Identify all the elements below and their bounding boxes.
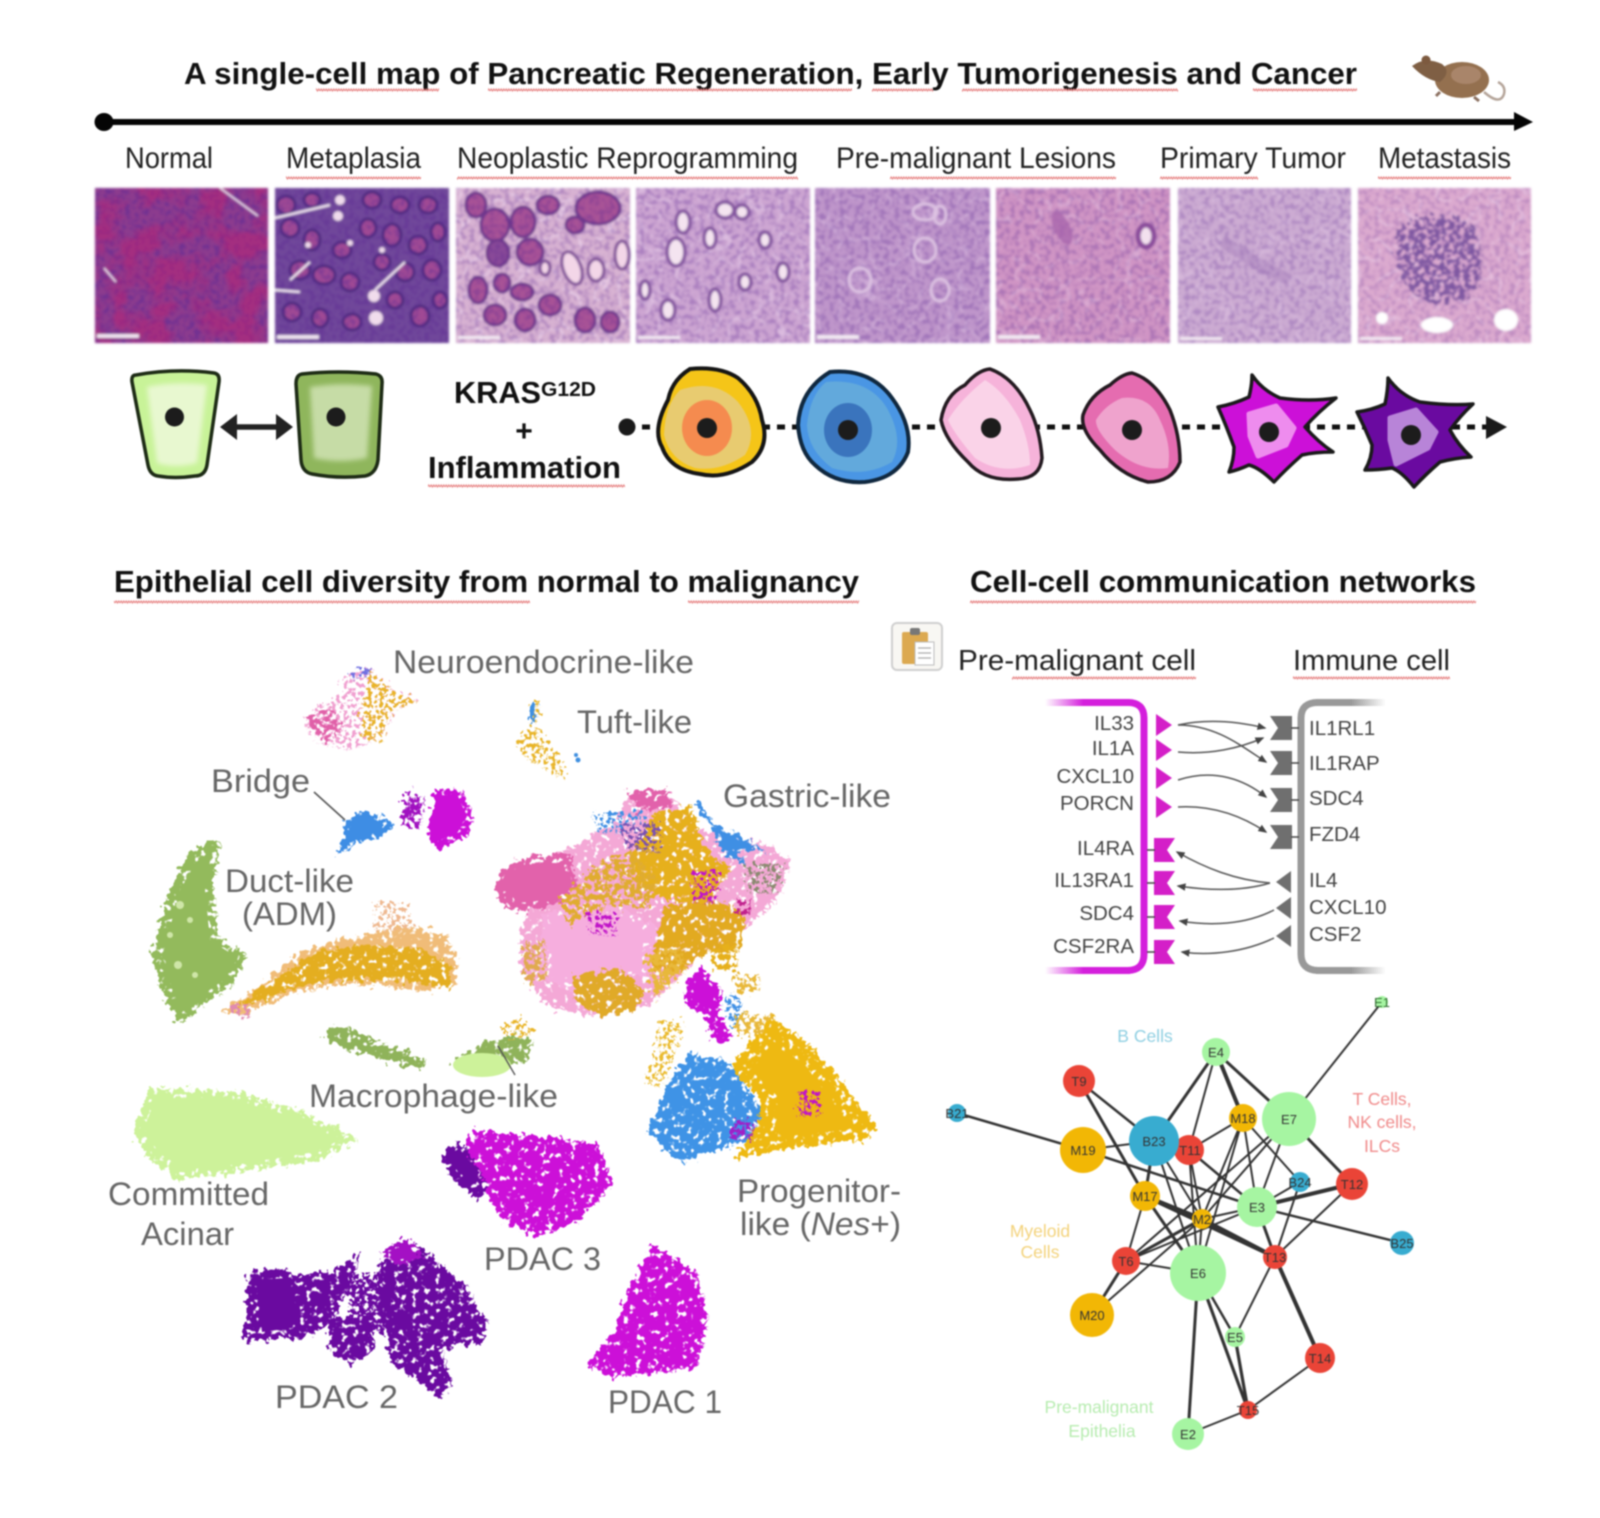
cluster: progenitor-like <box>645 1017 878 1163</box>
heading: communication networks: Cell-cell communication networks <box>970 564 1476 599</box>
network nodes: T cells <box>1063 1065 1368 1419</box>
icon: duct-like cell <box>296 372 382 477</box>
pre-malignant gene labels: IL13RA1 <box>1054 869 1134 892</box>
category label: myeloid <box>1010 1221 1070 1262</box>
histology panels <box>95 188 1531 343</box>
stage labels: Primary Tumor <box>1160 142 1346 175</box>
immune membrane <box>1301 699 1386 974</box>
heading: immune cell: Immune cell <box>1293 645 1450 677</box>
stage labels <box>125 142 1511 180</box>
category label: T cells: ILCs <box>1364 1136 1400 1156</box>
category label: pre-malignant epithelia: Epithelia <box>1068 1421 1136 1441</box>
KRAS label: KRAS <box>454 375 541 410</box>
panel: metastasis histology <box>1358 188 1531 343</box>
immune gene labels: IL4 <box>1309 869 1338 892</box>
icon: rose cell <box>1083 373 1180 482</box>
icon: clipboard <box>892 623 942 670</box>
cluster labels: Tuft-like <box>577 704 692 740</box>
category label: pre-malignant epithelia: Pre-malignant <box>1045 1397 1154 1417</box>
icon: magenta tumor cell <box>1218 375 1336 482</box>
network node labels: E7 <box>1281 1112 1297 1127</box>
cluster: duct-like <box>152 839 248 1024</box>
network node labels: B25 <box>1390 1236 1414 1251</box>
immune gene labels: CXCL10 <box>1309 896 1386 919</box>
leader line: macrophage <box>498 1046 515 1075</box>
cluster labels: Progenitor- <box>737 1173 901 1209</box>
UMAP scatter plot <box>108 644 901 1420</box>
cluster labels: Neuroendocrine-like <box>393 644 694 680</box>
leader line: bridge <box>314 792 345 820</box>
cluster: PDAC 1 <box>587 1243 708 1378</box>
arrow: reversible <box>220 414 293 440</box>
category label: T cells: T Cells, <box>1352 1089 1412 1109</box>
cluster labels: PDAC 2 <box>275 1379 398 1415</box>
icon: acinar cell <box>132 371 219 478</box>
pre-malignant gene labels: CSF2RA <box>1053 935 1134 958</box>
cluster labels: Acinar <box>141 1216 234 1252</box>
immune gene labels: CSF2 <box>1309 923 1361 946</box>
cluster: neuroendocrine-like <box>304 668 420 752</box>
category label: myeloid: Myeloid <box>1010 1221 1070 1241</box>
network node labels <box>945 995 1414 1442</box>
cluster: PDAC 2 <box>245 1238 487 1398</box>
immune gene labels <box>1309 717 1386 946</box>
pre-malignant gene labels: SDC4 <box>1079 902 1134 925</box>
cluster: magenta column <box>684 965 778 1046</box>
icon: light pink cell <box>941 369 1042 479</box>
network nodes: B cells <box>948 1104 1414 1255</box>
network node labels: E4 <box>1208 1045 1224 1060</box>
network node labels: E2 <box>1180 1427 1196 1442</box>
cluster: PDAC 3 <box>442 1130 613 1237</box>
cluster labels: Committed <box>108 1176 269 1212</box>
category label: myeloid: Cells <box>1021 1242 1060 1262</box>
cluster labels: PDAC 1 <box>608 1384 722 1420</box>
network node labels: M19 <box>1070 1143 1096 1158</box>
network node labels: T9 <box>1071 1074 1087 1089</box>
network node labels: M17 <box>1132 1189 1158 1204</box>
heading: epithelial diversity: Epithelial cell diversity from normal to malignancy <box>114 564 860 599</box>
network node labels: T15 <box>1237 1403 1259 1418</box>
icon: mouse <box>1412 56 1504 101</box>
network node labels: M18 <box>1230 1111 1256 1126</box>
network node labels: E5 <box>1227 1330 1243 1345</box>
communication network graph <box>945 995 1417 1450</box>
network edges <box>957 1002 1402 1434</box>
network node labels: E1 <box>1374 995 1390 1010</box>
cluster labels: PDAC 3 <box>484 1241 601 1277</box>
network node labels: M2 <box>1193 1212 1211 1227</box>
network nodes: myeloid <box>1060 1104 1257 1337</box>
KRAS label <box>428 375 625 488</box>
stage labels: Neoplastic Reprogramming <box>457 142 798 175</box>
network node labels: T6 <box>1118 1254 1134 1269</box>
icon: purple tumor cell <box>1357 378 1473 487</box>
network node labels: T13 <box>1264 1250 1286 1265</box>
normal and metaplastic cells <box>132 371 382 478</box>
icon: gold cell <box>658 368 764 476</box>
network node labels: B23 <box>1142 1134 1166 1149</box>
cluster: gastric-like <box>496 790 790 1017</box>
pre-malignant membrane <box>1045 699 1144 974</box>
heading: pre-malignant cell: Pre-malignant cell <box>958 645 1196 677</box>
pre-malignant gene labels: IL33 <box>1094 712 1134 735</box>
stage labels: Normal <box>125 142 213 175</box>
category label: T cells: NK cells, <box>1347 1112 1417 1132</box>
immune gene labels: FZD4 <box>1309 823 1360 846</box>
pre-malignant gene labels: IL1A <box>1092 737 1134 760</box>
panel: neoplastic histology 2 <box>636 188 810 343</box>
progression arrow <box>618 416 1507 439</box>
cluster labels: (ADM) <box>242 896 337 932</box>
category label: B cells: B Cells <box>1117 1026 1173 1046</box>
network node labels: M20 <box>1079 1308 1105 1323</box>
KRAS label: Inflammation <box>428 450 621 485</box>
progression cells <box>658 368 1473 487</box>
network node labels: E3 <box>1249 1200 1265 1215</box>
pre-malignant gene labels: CXCL10 <box>1056 765 1134 788</box>
cluster labels <box>108 644 901 1420</box>
network node labels: T14 <box>1309 1351 1331 1366</box>
ligand-receptor diagram <box>958 645 1450 974</box>
KRAS label: G12D <box>541 379 596 401</box>
network node labels: T12 <box>1341 1177 1363 1192</box>
cluster labels: Bridge <box>211 763 310 799</box>
network node labels: E6 <box>1190 1266 1206 1281</box>
cluster: macrophage-like right <box>452 1018 535 1077</box>
panel: metaplasia histology <box>275 188 449 343</box>
panel: normal histology <box>95 188 268 343</box>
timeline arrow <box>94 112 1533 131</box>
category label: T cells <box>1347 1089 1417 1156</box>
pre-malignant gene labels <box>1053 712 1134 958</box>
cluster: bridge <box>337 811 394 856</box>
ligands: pre-malignant <box>1156 714 1172 818</box>
stage labels: Metastasis <box>1378 142 1511 175</box>
stage labels: Metaplasia <box>286 142 422 175</box>
cluster: magenta small <box>402 790 474 850</box>
network node labels: T11 <box>1179 1143 1201 1158</box>
cluster labels: Duct-like <box>225 863 354 899</box>
receptors: pre-malignant <box>1147 838 1175 964</box>
panel: primary tumor histology <box>1178 188 1351 343</box>
pre-malignant gene labels: PORCN <box>1060 792 1134 815</box>
panel: pre-malignant histology 1 <box>815 188 990 343</box>
cluster labels: Macrophage-like <box>309 1078 558 1114</box>
pre-malignant gene labels: IL4RA <box>1077 837 1134 860</box>
stage labels: Pre-malignant Lesions <box>836 142 1116 175</box>
panel: pre-malignant histology 2 <box>996 188 1170 343</box>
category label: pre-malignant epithelia <box>1045 1397 1154 1441</box>
title: A single-cell map of Pancreatic Regeneration, Early Tumorigenesis and Cancer <box>184 56 1357 91</box>
immune gene labels: SDC4 <box>1309 787 1364 810</box>
interaction arrows <box>1177 721 1274 953</box>
cluster labels: Gastric-like <box>723 778 891 814</box>
immune gene labels: IL1RL1 <box>1309 717 1375 740</box>
KRAS label: + <box>515 415 533 448</box>
network nodes: epithelia <box>1170 996 1388 1450</box>
panel: neoplastic histology 1 <box>456 188 630 343</box>
ligands: immune <box>1276 871 1291 947</box>
network node labels: B21 <box>945 1106 969 1121</box>
receptors: immune <box>1270 716 1299 849</box>
icon: blue cell <box>798 372 909 482</box>
cluster: macrophage-like left <box>325 1026 425 1068</box>
immune gene labels: IL1RAP <box>1309 752 1380 775</box>
cluster: committed acinar <box>133 1088 358 1180</box>
cluster: gold streak <box>222 903 458 1018</box>
cluster: tuft-like <box>516 702 580 782</box>
cluster labels: like (Nes+) <box>740 1206 901 1242</box>
network node labels: B24 <box>1288 1175 1312 1190</box>
